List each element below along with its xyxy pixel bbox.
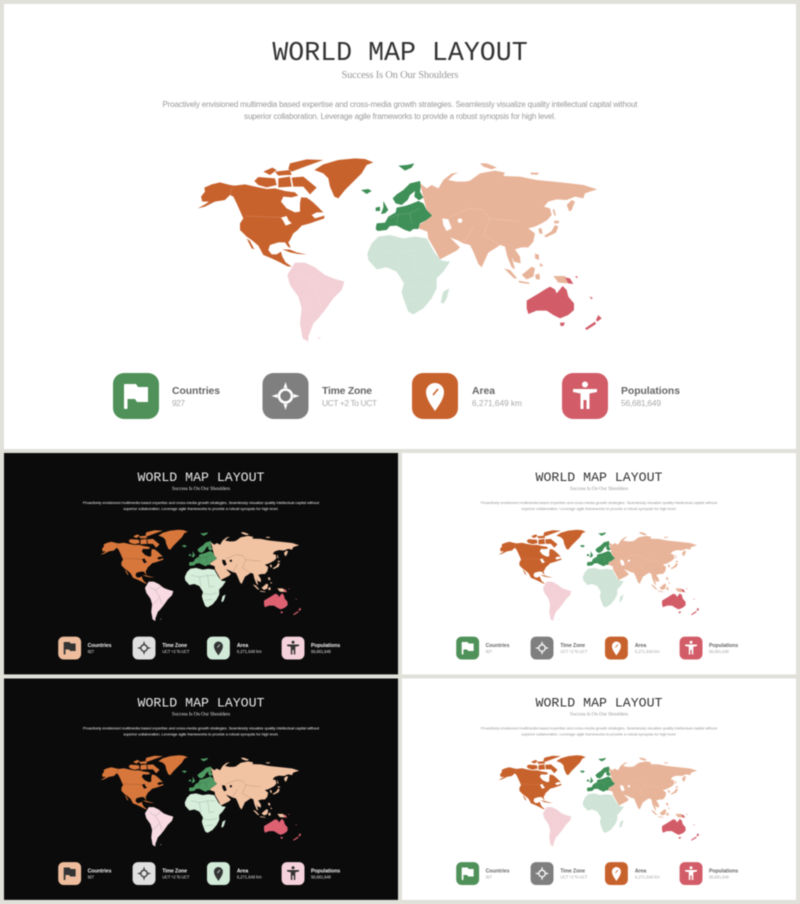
stat: populations: 56,681,649 [311,649,332,654]
title: WORLD MAP LAYOUT [536,470,663,485]
subtitle: Success Is On Our Shoulders [342,70,458,81]
stat: countries: 927 [486,874,493,879]
stat: populations: 56,681,649 [709,874,730,879]
stat: countries [58,637,112,659]
stat: populations: 56,681,649 [709,649,730,654]
stat: populations [282,862,340,885]
stat: countries: 927 [486,649,493,654]
stat: area: 6,271,649 km [635,649,660,654]
stat: countries [58,862,112,885]
description [162,100,638,121]
title: WORLD MAP LAYOUT [272,38,528,68]
stat: countries [456,637,510,659]
description [83,726,320,737]
stat: populations [282,637,340,659]
world map [100,530,301,621]
stat: area: 6,271,649 km [237,649,262,654]
description [83,500,320,511]
panel: main white slide [4,4,796,449]
stat: time zone [531,637,588,659]
subtitle: Success Is On Our Shoulders [570,486,628,492]
stat: populations: Populations [311,643,340,649]
stat: countries: Countries [88,869,112,875]
description [481,726,718,737]
panel: white slide row 3 [402,678,796,900]
stat: populations: Populations [709,869,738,875]
description [481,500,718,511]
stat: time zone [133,862,190,885]
stat: area: 6,271,649 km [635,874,660,879]
stat: time zone: Time Zone [560,869,585,875]
world map [498,755,699,846]
stat: area: Area [635,643,646,649]
description: superior collaboration. Leverage agile frameworks to provide a robust synopsis for high level. [123,506,279,511]
stat: time zone [133,637,190,659]
stat: countries: 927 [88,874,95,879]
stat: time zone [531,862,588,885]
stat: countries: Countries [486,643,510,649]
stat: area: Area [237,869,248,875]
stat: time zone: UCT +2 To UCT [560,874,588,879]
description: Proactively envisioned multimedia based expertise and cross-media growth strategies. Seamlessly visualize quality intellectual capital without [162,100,638,109]
stat: countries: 927 [88,649,95,654]
world map [198,158,602,342]
stat: countries: 927 [172,398,185,408]
description: Proactively envisioned multimedia based expertise and cross-media growth strategies. Seamlessly visualize quality intellectual capital without [481,726,718,731]
stat: area: Area [635,869,646,875]
stat: area [207,862,262,885]
description: Proactively envisioned multimedia based expertise and cross-media growth strategies. Seamlessly visualize quality intellectual capital without [83,500,320,505]
stat: time zone: Time Zone [560,643,585,649]
stat: area [412,373,522,419]
description: superior collaboration. Leverage agile frameworks to provide a robust synopsis for high level. [123,732,279,737]
stat: populations: 56,681,649 [621,398,661,408]
title: WORLD MAP LAYOUT [536,695,663,710]
stat: populations: Populations [709,643,738,649]
stat: populations: Populations [311,869,340,875]
stat: countries [456,862,510,885]
description: Proactively envisioned multimedia based expertise and cross-media growth strategies. Seamlessly visualize quality intellectual capital without [83,726,320,731]
stat: populations: Populations [621,386,680,397]
stat: populations [562,373,680,419]
stat: area: 6,271,649 km [472,398,522,408]
panel: dark slide row 3 [4,678,398,900]
stat: area [207,637,262,659]
title: WORLD MAP LAYOUT [138,470,265,485]
description: superior collaboration. Leverage agile frameworks to provide a robust synopsis for high level. [521,732,677,737]
panel: dark slide row 2 [4,453,398,674]
subtitle: Success Is On Our Shoulders [172,711,230,717]
stat: area: Area [472,386,495,397]
stat: area: 6,271,649 km [237,874,262,879]
subtitle: Success Is On Our Shoulders [570,711,628,717]
stat: time zone: Time Zone [322,386,372,397]
description: superior collaboration. Leverage agile frameworks to provide a robust synopsis for high level. [244,112,556,121]
stat: time zone: UCT +2 To UCT [322,398,377,408]
world map [100,755,301,846]
world map [498,530,699,621]
description: superior collaboration. Leverage agile frameworks to provide a robust synopsis for high level. [521,506,677,511]
stat: area: Area [237,643,248,649]
stat: populations [680,637,738,659]
stat: time zone: UCT +2 To UCT [162,649,190,654]
stat: time zone [262,373,377,419]
stat: time zone: UCT +2 To UCT [162,874,190,879]
description: Proactively envisioned multimedia based expertise and cross-media growth strategies. Seamlessly visualize quality intellectual capital without [481,500,718,505]
stat: time zone: UCT +2 To UCT [560,649,588,654]
stat: populations: 56,681,649 [311,874,332,879]
stat: area [605,862,660,885]
title: WORLD MAP LAYOUT [138,695,265,710]
panel: white slide row 2 [402,453,796,674]
stat: time zone: Time Zone [162,869,187,875]
stat: countries [113,373,220,419]
stat: countries: Countries [486,869,510,875]
stat: countries: Countries [88,643,112,649]
subtitle: Success Is On Our Shoulders [172,486,230,492]
stat: populations [680,862,738,885]
stat: countries: Countries [172,386,220,397]
stat: area [605,637,660,659]
stat: time zone: Time Zone [162,643,187,649]
